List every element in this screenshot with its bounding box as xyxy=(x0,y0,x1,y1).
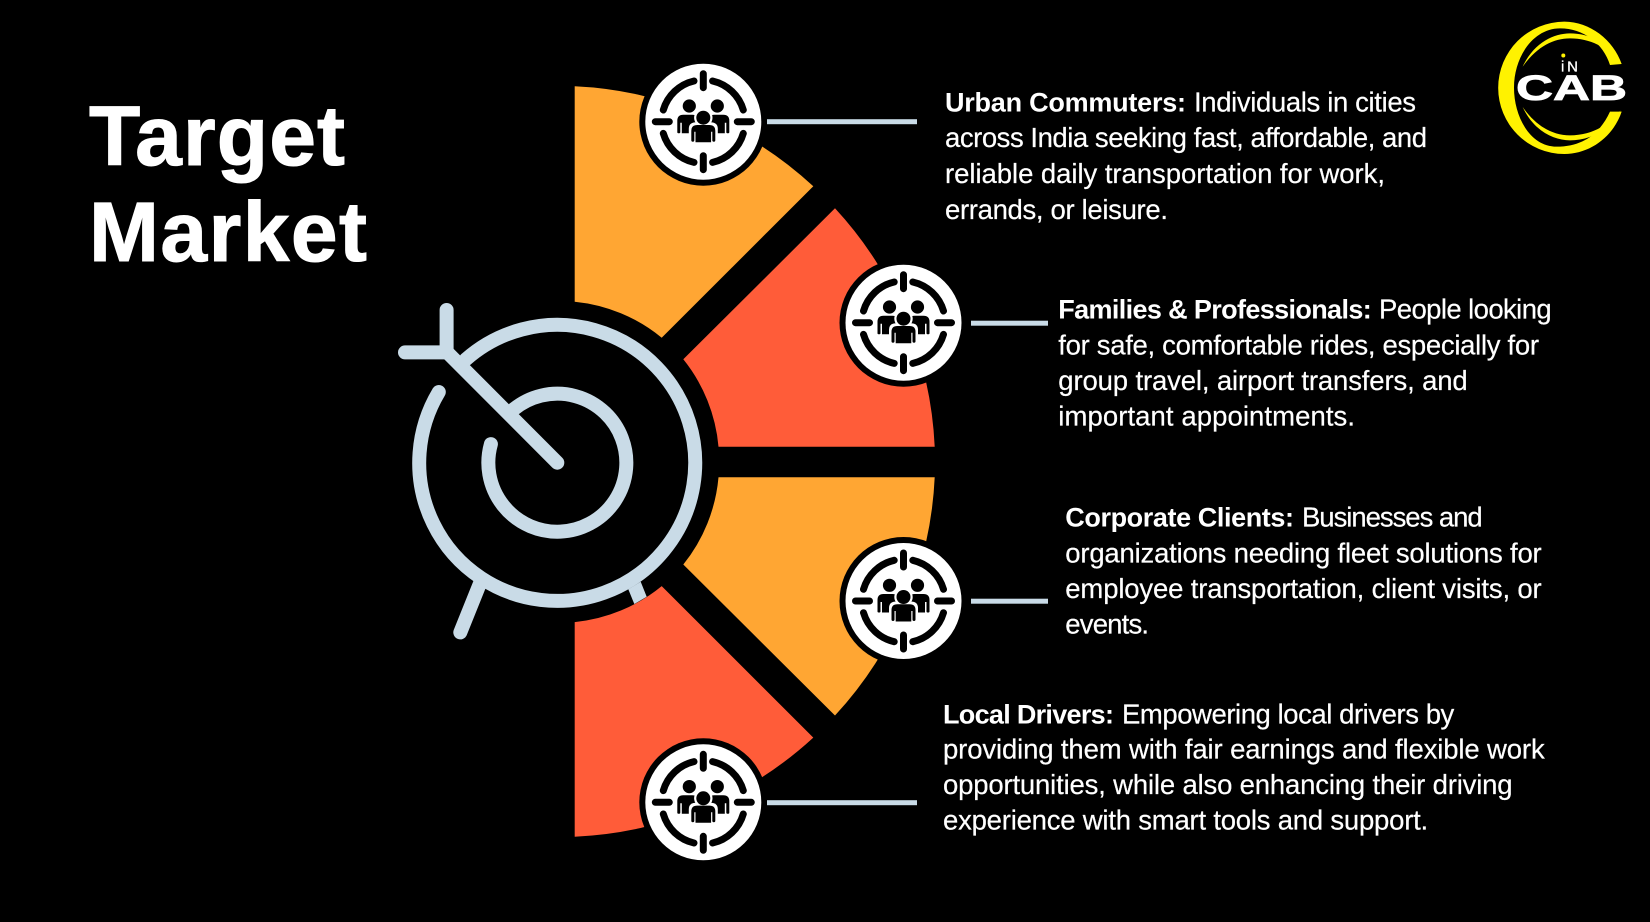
text block: corporate clients: Corporate Clients: xyxy=(1065,503,1294,533)
wedge: families and professionals xyxy=(683,208,935,447)
text block: urban commuters: errands, or leisure. xyxy=(945,194,1168,225)
text block: local drivers: Local Drivers: xyxy=(943,699,1114,729)
text block: urban commuters xyxy=(945,87,1427,225)
icon: audience target 2 xyxy=(840,259,968,387)
connector line 4 xyxy=(767,800,917,805)
wedge chart: four market segments xyxy=(575,86,935,837)
text block: urban commuters: Urban Commuters: xyxy=(945,88,1186,118)
text block: local drivers: opportunities, while also enhancing their driving xyxy=(943,769,1513,800)
wedge: corporate clients xyxy=(683,477,935,716)
text block: local drivers xyxy=(943,698,1545,835)
logo: inCAB: CAB xyxy=(1516,69,1627,108)
text block: corporate clients: Businesses and xyxy=(1302,502,1483,533)
text block: corporate clients: events. xyxy=(1065,608,1149,639)
icon: target with arrow xyxy=(405,310,695,632)
text block: families and professionals: for safe, comfortable rides, especially for xyxy=(1058,329,1539,360)
connector line 3 xyxy=(971,599,1048,604)
text block: urban commuters: Individuals in cities xyxy=(1194,87,1416,118)
title: Target xyxy=(89,89,345,183)
text block: urban commuters: reliable daily transportation for work, xyxy=(945,158,1385,189)
text block: families and professionals: People looking xyxy=(1379,293,1552,324)
title: Market xyxy=(89,185,367,279)
title xyxy=(89,89,367,279)
connector line 2 xyxy=(971,321,1048,326)
text block: local drivers: experience with smart tools and support. xyxy=(943,804,1428,835)
text block: families and professionals: important appointments. xyxy=(1058,401,1355,432)
logo: inCAB xyxy=(1498,22,1627,154)
wedge: local drivers xyxy=(575,586,813,837)
icon: audience target 1 xyxy=(639,58,767,186)
text block: corporate clients xyxy=(1065,502,1542,639)
icon: audience target 3 xyxy=(840,537,968,665)
text block: urban commuters: across India seeking fast, affordable, and xyxy=(945,122,1427,153)
text block: local drivers: Empowering local drivers by xyxy=(1122,698,1455,729)
text block: local drivers: providing them with fair earnings and flexible work xyxy=(943,733,1545,764)
text block: families and professionals xyxy=(1058,293,1552,432)
text block: corporate clients: organizations needing fleet solutions for xyxy=(1065,538,1542,569)
icon: audience target 4 xyxy=(639,738,767,866)
text block: families and professionals: group travel, airport transfers, and xyxy=(1058,365,1468,396)
wedge: urban commuters xyxy=(575,86,813,338)
text block: families and professionals: Families & Professionals: xyxy=(1058,294,1372,324)
text block: corporate clients: employee transportation, client visits, or xyxy=(1065,573,1542,604)
logo: inCAB: iN xyxy=(1561,59,1578,76)
connector line 1 xyxy=(767,119,917,124)
